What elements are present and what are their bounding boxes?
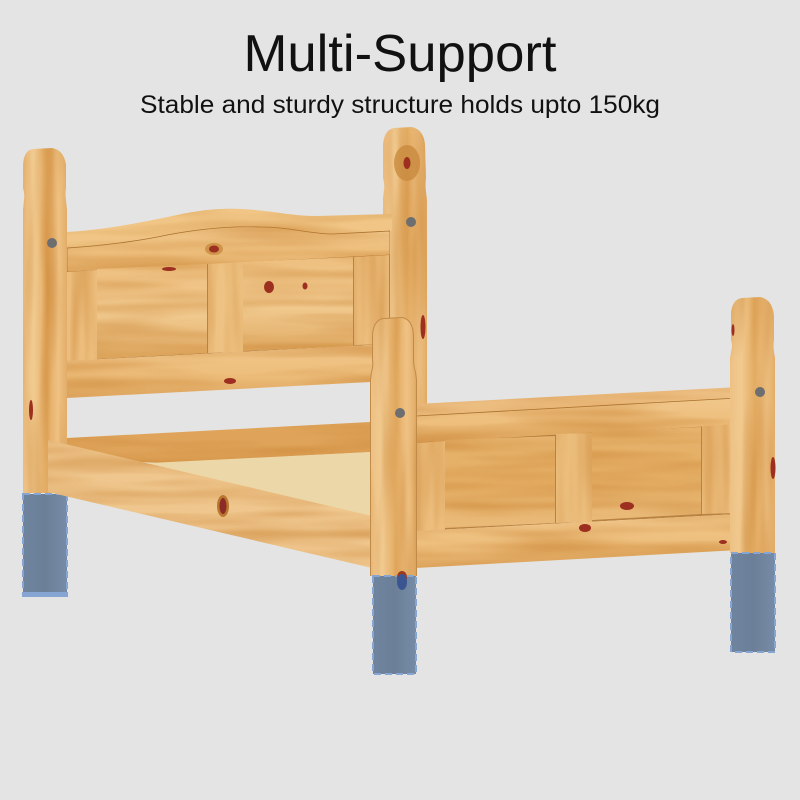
headboard right post — [383, 127, 427, 404]
headboard centre stile — [208, 262, 243, 353]
headboard right stile — [354, 255, 389, 345]
foot top rail — [416, 387, 739, 416]
foot right panel — [592, 427, 701, 520]
foot left post edge shadow — [370, 317, 417, 576]
knots headboard — [29, 157, 426, 420]
bolt left — [47, 238, 57, 248]
foot left post — [371, 318, 416, 576]
headboard lower rail — [67, 344, 390, 398]
foot panel background — [416, 425, 738, 531]
foot left panel — [445, 436, 555, 528]
leg knot — [397, 571, 407, 590]
headboard left panel — [97, 264, 207, 359]
headboard left stile — [67, 270, 97, 361]
foot upper rail — [416, 398, 738, 443]
slats — [150, 452, 372, 525]
foot lower rail — [416, 514, 738, 568]
knots footboard — [579, 324, 776, 544]
leg base band left — [23, 592, 68, 597]
headboard upper rail — [67, 227, 390, 272]
knot halos headboard — [205, 145, 420, 255]
headboard panel background — [67, 255, 390, 361]
headboard top rail — [67, 209, 392, 248]
foot left leg — [373, 576, 416, 674]
back rail — [67, 422, 370, 463]
headboard left leg — [23, 494, 67, 596]
foot right leg — [731, 553, 775, 652]
side rail — [48, 440, 372, 568]
foot right stile — [702, 424, 737, 514]
foot centre stile — [556, 433, 592, 523]
foot right post — [730, 297, 775, 553]
bolt right — [406, 217, 416, 227]
title: Multi-Support — [244, 25, 557, 83]
footboard — [370, 297, 776, 674]
mattress support — [48, 422, 372, 568]
headboard left post — [23, 148, 67, 493]
headboard — [23, 127, 427, 597]
side rail knot — [217, 495, 229, 517]
foot left stile — [416, 441, 445, 531]
bed illustration — [23, 127, 776, 674]
subtitle: Stable and sturdy structure holds upto 150kg — [140, 91, 660, 119]
bolts footboard — [395, 387, 765, 418]
headboard right panel — [243, 257, 353, 351]
